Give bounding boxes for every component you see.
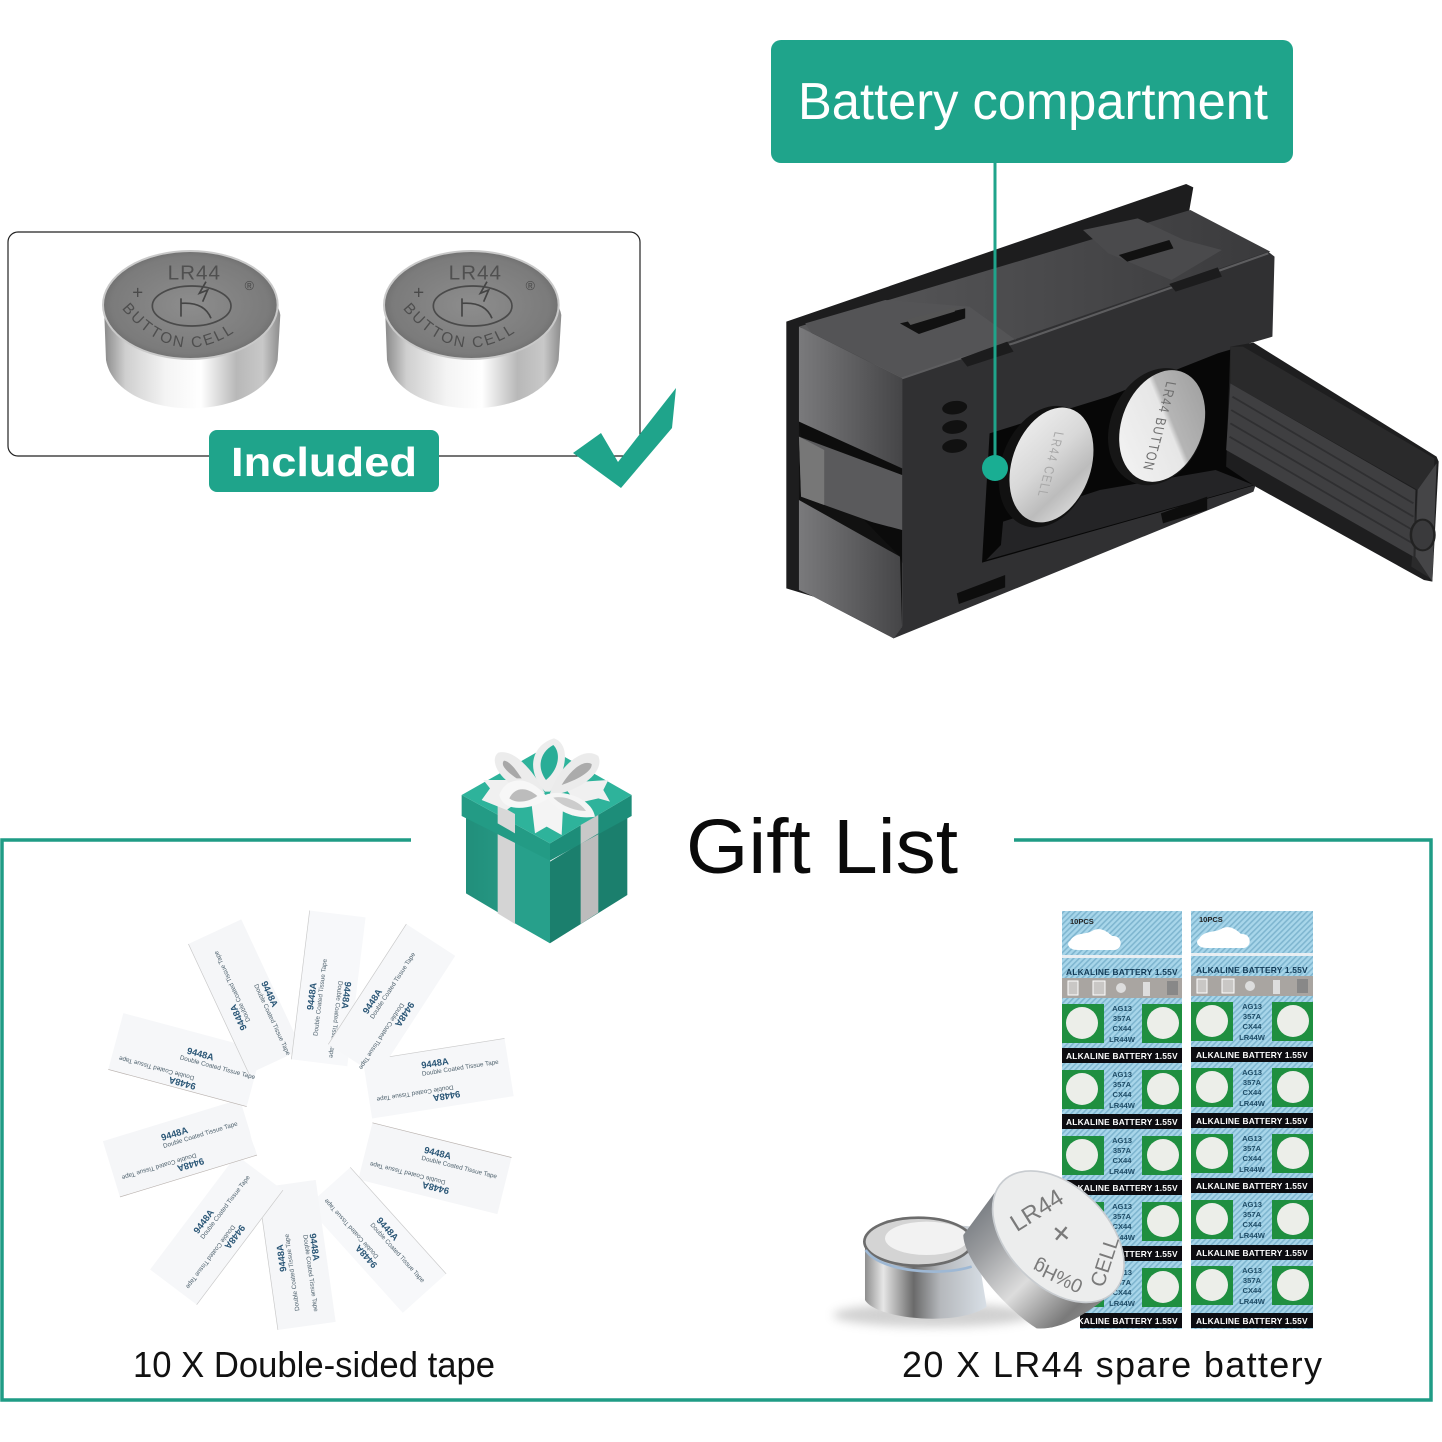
row 2: AG13 [1242,1068,1262,1077]
tape strip 2: Double Coated Tissue Tape [421,1155,498,1181]
row 2: ALKALINE BATTERY 1.55V [1196,1116,1308,1126]
row 3: CX44 [1112,1156,1132,1165]
row 1 [1191,1002,1313,1062]
tape strip 10 [326,924,455,1079]
row 4 [1062,1202,1182,1261]
tape strip 2: 9448A [423,1145,453,1161]
tape strip 6: 9448A [176,1156,205,1173]
row 4: ALKALINE BATTERY 1.55V [1196,1248,1308,1258]
battery card: left: 10PCS [1070,917,1094,926]
tape strip 7: Double Coated Tissue Tape [118,1054,195,1081]
tape strip 3: 9448A [374,1215,400,1243]
badge: Included [209,430,439,492]
icon: LR44 button cell 1: BUTTON CELL [122,302,234,348]
row 4: AG13 [1242,1200,1262,1209]
tape strip 10: 9448A [393,1000,416,1029]
tape strip 7: 9448A [167,1075,197,1091]
tape strip 7 [108,1013,263,1107]
tape strip 3: Double Coated Tissue Tape [369,1222,426,1284]
row 1 [1062,1004,1182,1063]
row 1: AG13 [1242,1002,1262,1011]
row 1: AG13 [1112,1004,1132,1013]
badge: Included: Included [231,439,417,485]
row 3 [1191,1134,1313,1193]
tape strip 8: 9448A [228,1003,249,1032]
row 4: AG13 [1112,1202,1132,1211]
row 2: LR44W [1239,1099,1266,1108]
tape strip 5: 9448A [222,1223,247,1251]
tape strip 4: Double Coated Tissue Tape [284,1233,301,1311]
row 2: LR44W [1109,1101,1136,1110]
icon: LR44 button cell 1: ® [245,279,255,293]
icon: LR44 button cell 2: + [413,281,424,302]
row 3 [1062,1136,1182,1195]
tape strip 9: 9448A [305,982,319,1011]
battery card: right: 10PCS [1199,915,1223,924]
row 2 [1062,1070,1182,1129]
icon: LR44 button cell 2 [383,250,562,408]
row 1: ALKALINE BATTERY 1.55V [1196,1050,1308,1060]
callout: Battery compartment [771,40,1293,481]
front battery: LR44 [1006,1184,1069,1237]
tape strip 8: 9448A [259,979,280,1009]
row 3: ALKALINE BATTERY 1.55V [1066,1183,1178,1193]
row 5: AG13 [1112,1268,1132,1277]
row 2 [1191,1068,1313,1128]
tape strip 6: Double Coated Tissue Tape [162,1120,239,1150]
tape strip 10: Double Coated Tissue Tape [369,951,417,1020]
battery card: left [1062,911,1182,1329]
heading: Gift List: Gift List [686,804,958,890]
tape strip 3 [307,1167,446,1313]
row 1: CX44 [1112,1024,1132,1033]
row 4: ALKALINE BATTERY 1.55V [1066,1249,1178,1259]
icon: gift box [462,738,632,943]
tape strip 3: 9448A [353,1243,379,1270]
row 4 [1191,1200,1313,1260]
tape strip 9 [291,910,366,1066]
tape strip 10: 9448A [361,987,384,1016]
tape strip 6: Double Coated Tissue Tape [120,1151,197,1181]
row 1: LR44W [1109,1035,1136,1044]
left coin battery [985,399,1107,534]
rear battery [864,1218,987,1319]
open battery door [1226,343,1439,582]
tape strip 1: Double Coated Tissue Tape [421,1059,500,1078]
row 3: CX44 [1242,1154,1262,1163]
row 2: CX44 [1112,1090,1132,1099]
row 2: 357A [1243,1078,1262,1087]
panel: included batteries [7,231,676,492]
tape strip 4 [258,1180,336,1330]
row 5 [1062,1268,1182,1328]
tape strip 7: 9448A [186,1046,215,1063]
row 2: AG13 [1112,1070,1132,1079]
tape strip 9: Double Coated Tissue Tape [327,980,344,1059]
thermometer device with open battery compartment [786,184,1439,638]
tape strip 8 [188,919,302,1074]
right coin battery [1095,361,1218,492]
tape strip 7: Double Coated Tissue Tape [179,1054,256,1081]
tape strip 8: Double Coated Tissue Tape [252,983,292,1057]
row 5: AG13 [1242,1266,1262,1275]
left coin battery: LR44 CELL [1034,431,1067,499]
tape strip 10: Double Coated Tissue Tape [357,1002,405,1071]
front battery: 0%Hg [1030,1255,1086,1296]
tape strip 6: 9448A [160,1125,189,1143]
row 1: CX44 [1242,1022,1262,1031]
battery card: left: ALKALINE BATTERY 1.55V [1066,967,1178,977]
panel frame: gift list [2,840,1431,1400]
row 1: 357A [1113,1014,1132,1023]
row 5: 357A [1243,1276,1262,1285]
row 5: ALKALINE BATTERY 1.55V [1066,1316,1178,1326]
row 3: LR44W [1239,1165,1266,1174]
battery card: right [1191,911,1313,1329]
row 2: CX44 [1242,1088,1262,1097]
icon: LR44 button cell 2: LR44 [449,261,502,284]
tape strip 2 [358,1123,512,1214]
tape strip 2: 9448A [421,1179,450,1196]
row 4: CX44 [1242,1220,1262,1229]
tape strip 5: Double Coated Tissue Tape [184,1224,236,1290]
row 5: LR44W [1239,1297,1266,1306]
outlined box [8,232,640,456]
tape strip 1: 9448A [432,1089,461,1103]
row 4: 357A [1243,1210,1262,1219]
icon: LR44 button cell 1: + [132,281,143,302]
row 5: 357A [1113,1278,1132,1287]
row 1: 357A [1243,1012,1262,1021]
tape strip 8: Double Coated Tissue Tape [213,949,252,1023]
row 5: CX44 [1242,1286,1262,1295]
tape strip 1: Double Coated Tissue Tape [376,1083,454,1103]
tape strip 5 [150,1155,283,1305]
tape strip 4: 9448A [275,1244,288,1272]
row 3: 357A [1243,1144,1262,1153]
label: batteries: 20 X LR44 spare battery [902,1344,1322,1385]
tape strip 2: Double Coated Tissue Tape [369,1160,446,1185]
row 4: 357A [1113,1212,1132,1221]
row 5 [1191,1266,1313,1328]
row 5: LR44W [1109,1299,1136,1308]
row 3: ALKALINE BATTERY 1.55V [1196,1181,1308,1191]
row 3: AG13 [1242,1134,1262,1143]
tape strip 4: Double Coated Tissue Tape [301,1234,319,1313]
tape strip 4: 9448A [308,1233,321,1262]
row 1: ALKALINE BATTERY 1.55V [1066,1051,1178,1061]
row 1: LR44W [1239,1033,1266,1042]
callout: Battery compartment: Battery compartment [798,73,1269,131]
row 2: ALKALINE BATTERY 1.55V [1066,1117,1178,1127]
row 4: LR44W [1109,1233,1136,1242]
label: tape: 10 X Double-sided tape [133,1344,495,1385]
icon: LR44 button cell 2: ® [526,279,536,293]
tape strip 1: 9448A [421,1056,450,1070]
battery card: right: ALKALINE BATTERY 1.55V [1196,965,1308,975]
tape strips: ten double-sided tape pieces [103,910,514,1330]
icon: LR44 button cell 1: LR44 [168,261,221,284]
tape strip 1 [363,1038,514,1118]
tape strip 5: Double Coated Tissue Tape [199,1174,252,1241]
front battery: CELL [1086,1234,1124,1290]
row 3: AG13 [1112,1136,1132,1145]
icon: check mark [573,388,676,488]
front battery: + [1042,1213,1080,1254]
tape strip 6 [103,1099,257,1197]
icon: LR44 button cell 1 [102,250,280,408]
front battery [963,1146,1149,1328]
right coin battery: LR44 BUTTON [1139,380,1180,472]
icon: LR44 button cell 2: BUTTON CELL [404,302,514,348]
white mask over card behind batteries [1050,1290,1080,1340]
icon: two loose LR44 batteries [833,1146,1149,1328]
row 3: 357A [1113,1146,1132,1155]
row 3: LR44W [1109,1167,1136,1176]
row 5: CX44 [1112,1288,1132,1297]
tape strip 3: Double Coated Tissue Tape [323,1197,380,1260]
tape strip 5: 9448A [192,1207,216,1236]
row 4: LR44W [1239,1231,1266,1240]
tape strip 9: Double Coated Tissue Tape [312,958,329,1036]
row 2: 357A [1113,1080,1132,1089]
row 5: ALKALINE BATTERY 1.55V [1196,1316,1308,1326]
tape strip 9: 9448A [340,981,353,1010]
row 4: CX44 [1112,1222,1132,1231]
